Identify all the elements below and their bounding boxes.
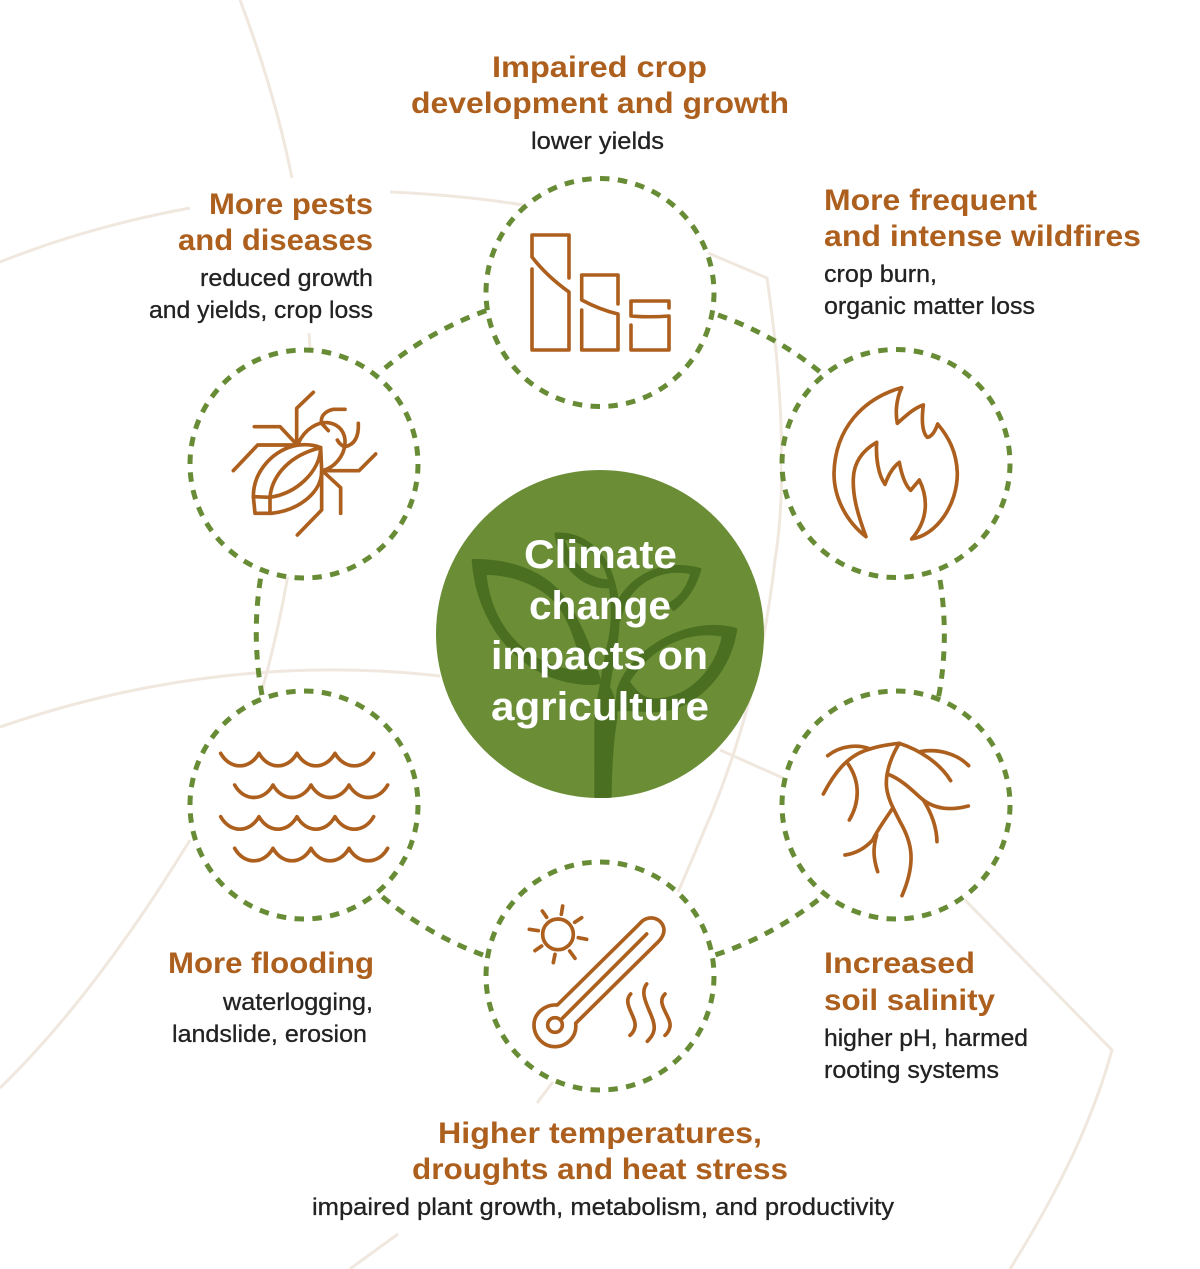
dashed circle bbox=[486, 178, 714, 406]
description: crop burn, bbox=[824, 261, 937, 288]
heading: Impaired crop bbox=[492, 51, 707, 84]
panel: pests and diseases bbox=[149, 188, 418, 578]
icon: shrinking crop bars bbox=[532, 235, 669, 350]
panel: wildfires bbox=[782, 184, 1141, 578]
title: agriculture bbox=[491, 685, 709, 729]
icon: insect bbox=[233, 392, 376, 535]
icon: flame bbox=[834, 388, 957, 539]
heading line two: soil salinity bbox=[824, 984, 995, 1017]
description line two: landslide, erosion bbox=[172, 1021, 367, 1048]
dashed circle bbox=[782, 350, 1010, 578]
panel: impaired crop development bbox=[411, 51, 789, 406]
description: waterlogging, bbox=[222, 989, 373, 1016]
description: impaired plant growth, metabolism, and productivity bbox=[312, 1194, 894, 1221]
icon: thermometer, sun and heat bbox=[529, 906, 670, 1047]
heading: More frequent bbox=[824, 184, 1037, 217]
heading line two: and intense wildfires bbox=[824, 220, 1141, 253]
dashed circle bbox=[486, 862, 714, 1090]
heading: Increased bbox=[824, 947, 975, 980]
icon: waves bbox=[221, 753, 388, 861]
icon: roots bbox=[823, 743, 969, 896]
green disc bbox=[436, 470, 764, 798]
dashed circle bbox=[190, 350, 418, 578]
description: higher pH, harmed bbox=[824, 1025, 1028, 1052]
description: lower yields bbox=[531, 128, 664, 155]
panel: higher temperatures bbox=[312, 862, 894, 1221]
title bbox=[491, 533, 709, 729]
title: Climate bbox=[524, 533, 677, 577]
panel: central title circle bbox=[436, 470, 764, 800]
heading: More pests bbox=[209, 188, 373, 221]
description line two: and yields, crop loss bbox=[149, 297, 373, 324]
title: impacts on bbox=[491, 634, 708, 678]
heading line two: and diseases bbox=[178, 224, 373, 257]
heading line two: droughts and heat stress bbox=[412, 1153, 788, 1186]
title: change bbox=[529, 584, 671, 628]
panel: soil salinity bbox=[782, 691, 1028, 1084]
dashed connector ring bbox=[256, 310, 944, 955]
description: reduced growth bbox=[200, 265, 373, 292]
heading line two: development and growth bbox=[411, 87, 789, 120]
heading: Higher temperatures, bbox=[438, 1117, 762, 1150]
description line two: rooting systems bbox=[824, 1057, 999, 1084]
panel: flooding bbox=[168, 691, 418, 1048]
dashed circle bbox=[782, 691, 1010, 919]
heading: More flooding bbox=[168, 947, 374, 980]
dashed circle bbox=[190, 691, 418, 919]
description line two: organic matter loss bbox=[824, 293, 1035, 320]
icon: plant silhouette bbox=[472, 532, 737, 800]
